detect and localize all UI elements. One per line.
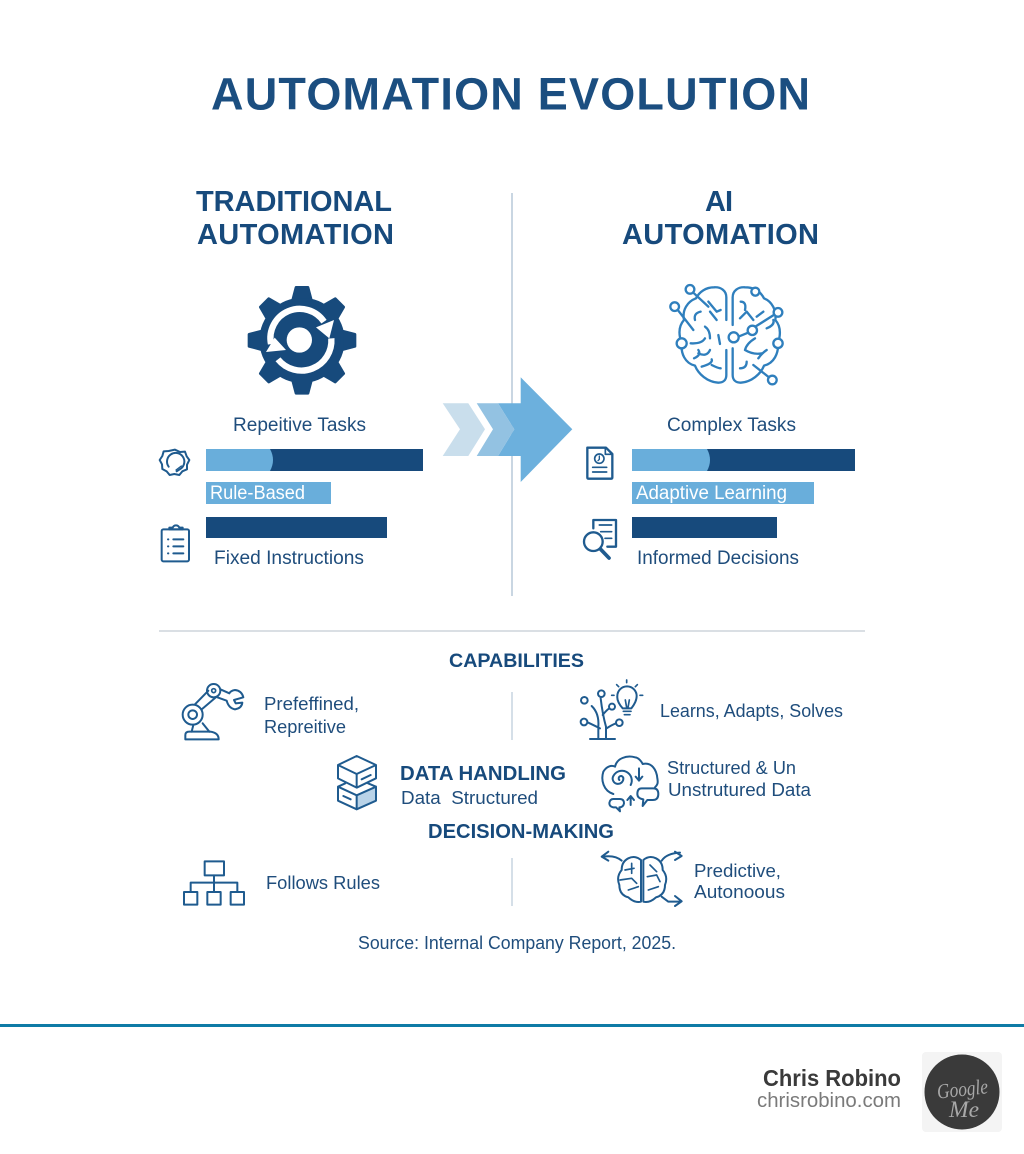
section divider bbox=[159, 630, 865, 632]
bar: adaptive learning: Adaptive Learning bbox=[636, 483, 787, 504]
bar: rule-based: Rule-Based bbox=[210, 483, 305, 504]
title: AUTOMATION EVOLUTION bbox=[211, 68, 810, 120]
icon: document report bbox=[587, 448, 612, 479]
footer author: Chris Robino bbox=[763, 1065, 901, 1091]
footer logo: google me: Google bbox=[936, 1074, 989, 1104]
heading: traditional automation bbox=[196, 186, 394, 251]
icon: gear with cycle arrows bbox=[249, 287, 355, 393]
text: data handling: DATA HANDLING bbox=[400, 763, 566, 785]
text: predefined repetitive bbox=[264, 694, 359, 737]
panel: ai automation bbox=[584, 186, 855, 569]
label: informed decisions: Informed Decisions bbox=[637, 548, 799, 569]
heading: ai automation bbox=[622, 186, 819, 251]
text: predictive autonomous: Predictive, bbox=[694, 861, 781, 881]
panel: traditional automation bbox=[160, 186, 423, 569]
text: structured and unstructured data bbox=[667, 758, 812, 800]
decision divider bbox=[511, 858, 513, 906]
footer logo: google me: Me bbox=[948, 1097, 979, 1122]
text: follows rules: Follows Rules bbox=[266, 873, 380, 893]
text: structured and unstructured data: Structured & Un bbox=[667, 758, 796, 778]
icon: clipboard bbox=[162, 525, 189, 561]
icon: document magnifier bbox=[584, 520, 616, 558]
footer author bbox=[757, 1065, 901, 1112]
heading: decision-making: DECISION-MAKING bbox=[428, 821, 614, 843]
heading: ai automation: AUTOMATION bbox=[622, 219, 819, 251]
capabilities divider bbox=[511, 692, 513, 740]
heading: traditional automation: AUTOMATION bbox=[197, 219, 394, 251]
icon: neural brain bbox=[670, 285, 783, 384]
center divider bbox=[511, 193, 513, 596]
text: predictive autonomous bbox=[694, 861, 785, 902]
text: predefined repetitive: Repreitive bbox=[264, 717, 346, 737]
bar: fixed instructions bbox=[206, 517, 387, 538]
icon: robot arm bbox=[183, 684, 243, 739]
text: data handling: Data Structured bbox=[401, 788, 538, 808]
icon: brain with arrows bbox=[602, 852, 682, 906]
heading: traditional automation: TRADITIONAL bbox=[196, 186, 392, 218]
label: repetitive tasks: Repeitive Tasks bbox=[233, 415, 366, 436]
icon: stacked data boxes bbox=[338, 756, 376, 809]
arrow: transition chevrons bbox=[443, 377, 572, 482]
bar: complex tasks bbox=[632, 449, 855, 471]
footer rule bbox=[0, 1024, 1024, 1027]
footer logo: google me bbox=[922, 1052, 1002, 1132]
text: predictive autonomous: Autonoous bbox=[694, 882, 785, 902]
text: structured and unstructured data: Unstrutured Data bbox=[668, 780, 812, 800]
text: data handling bbox=[400, 763, 566, 808]
icon: org chart bbox=[184, 861, 244, 905]
label: complex tasks: Complex Tasks bbox=[667, 415, 796, 436]
bar: informed decisions bbox=[632, 517, 777, 538]
text: predefined repetitive: Prefeffined, bbox=[264, 694, 359, 714]
footer author: chrisrobino.com bbox=[757, 1090, 901, 1112]
label: fixed instructions: Fixed Instructions bbox=[214, 548, 364, 569]
heading: capabilities: CAPABILITIES bbox=[449, 651, 584, 672]
icon: badge bbox=[160, 450, 189, 475]
icon: tree with lightbulb bbox=[581, 680, 643, 739]
source note: Source: Internal Company Report, 2025. bbox=[358, 933, 676, 953]
heading: ai automation: AI bbox=[705, 186, 733, 218]
icon: cloud with speech bubbles bbox=[602, 757, 658, 811]
bar: repetitive tasks bbox=[206, 449, 423, 471]
text: learns adapts solves: Learns, Adapts, Solves bbox=[660, 701, 843, 721]
